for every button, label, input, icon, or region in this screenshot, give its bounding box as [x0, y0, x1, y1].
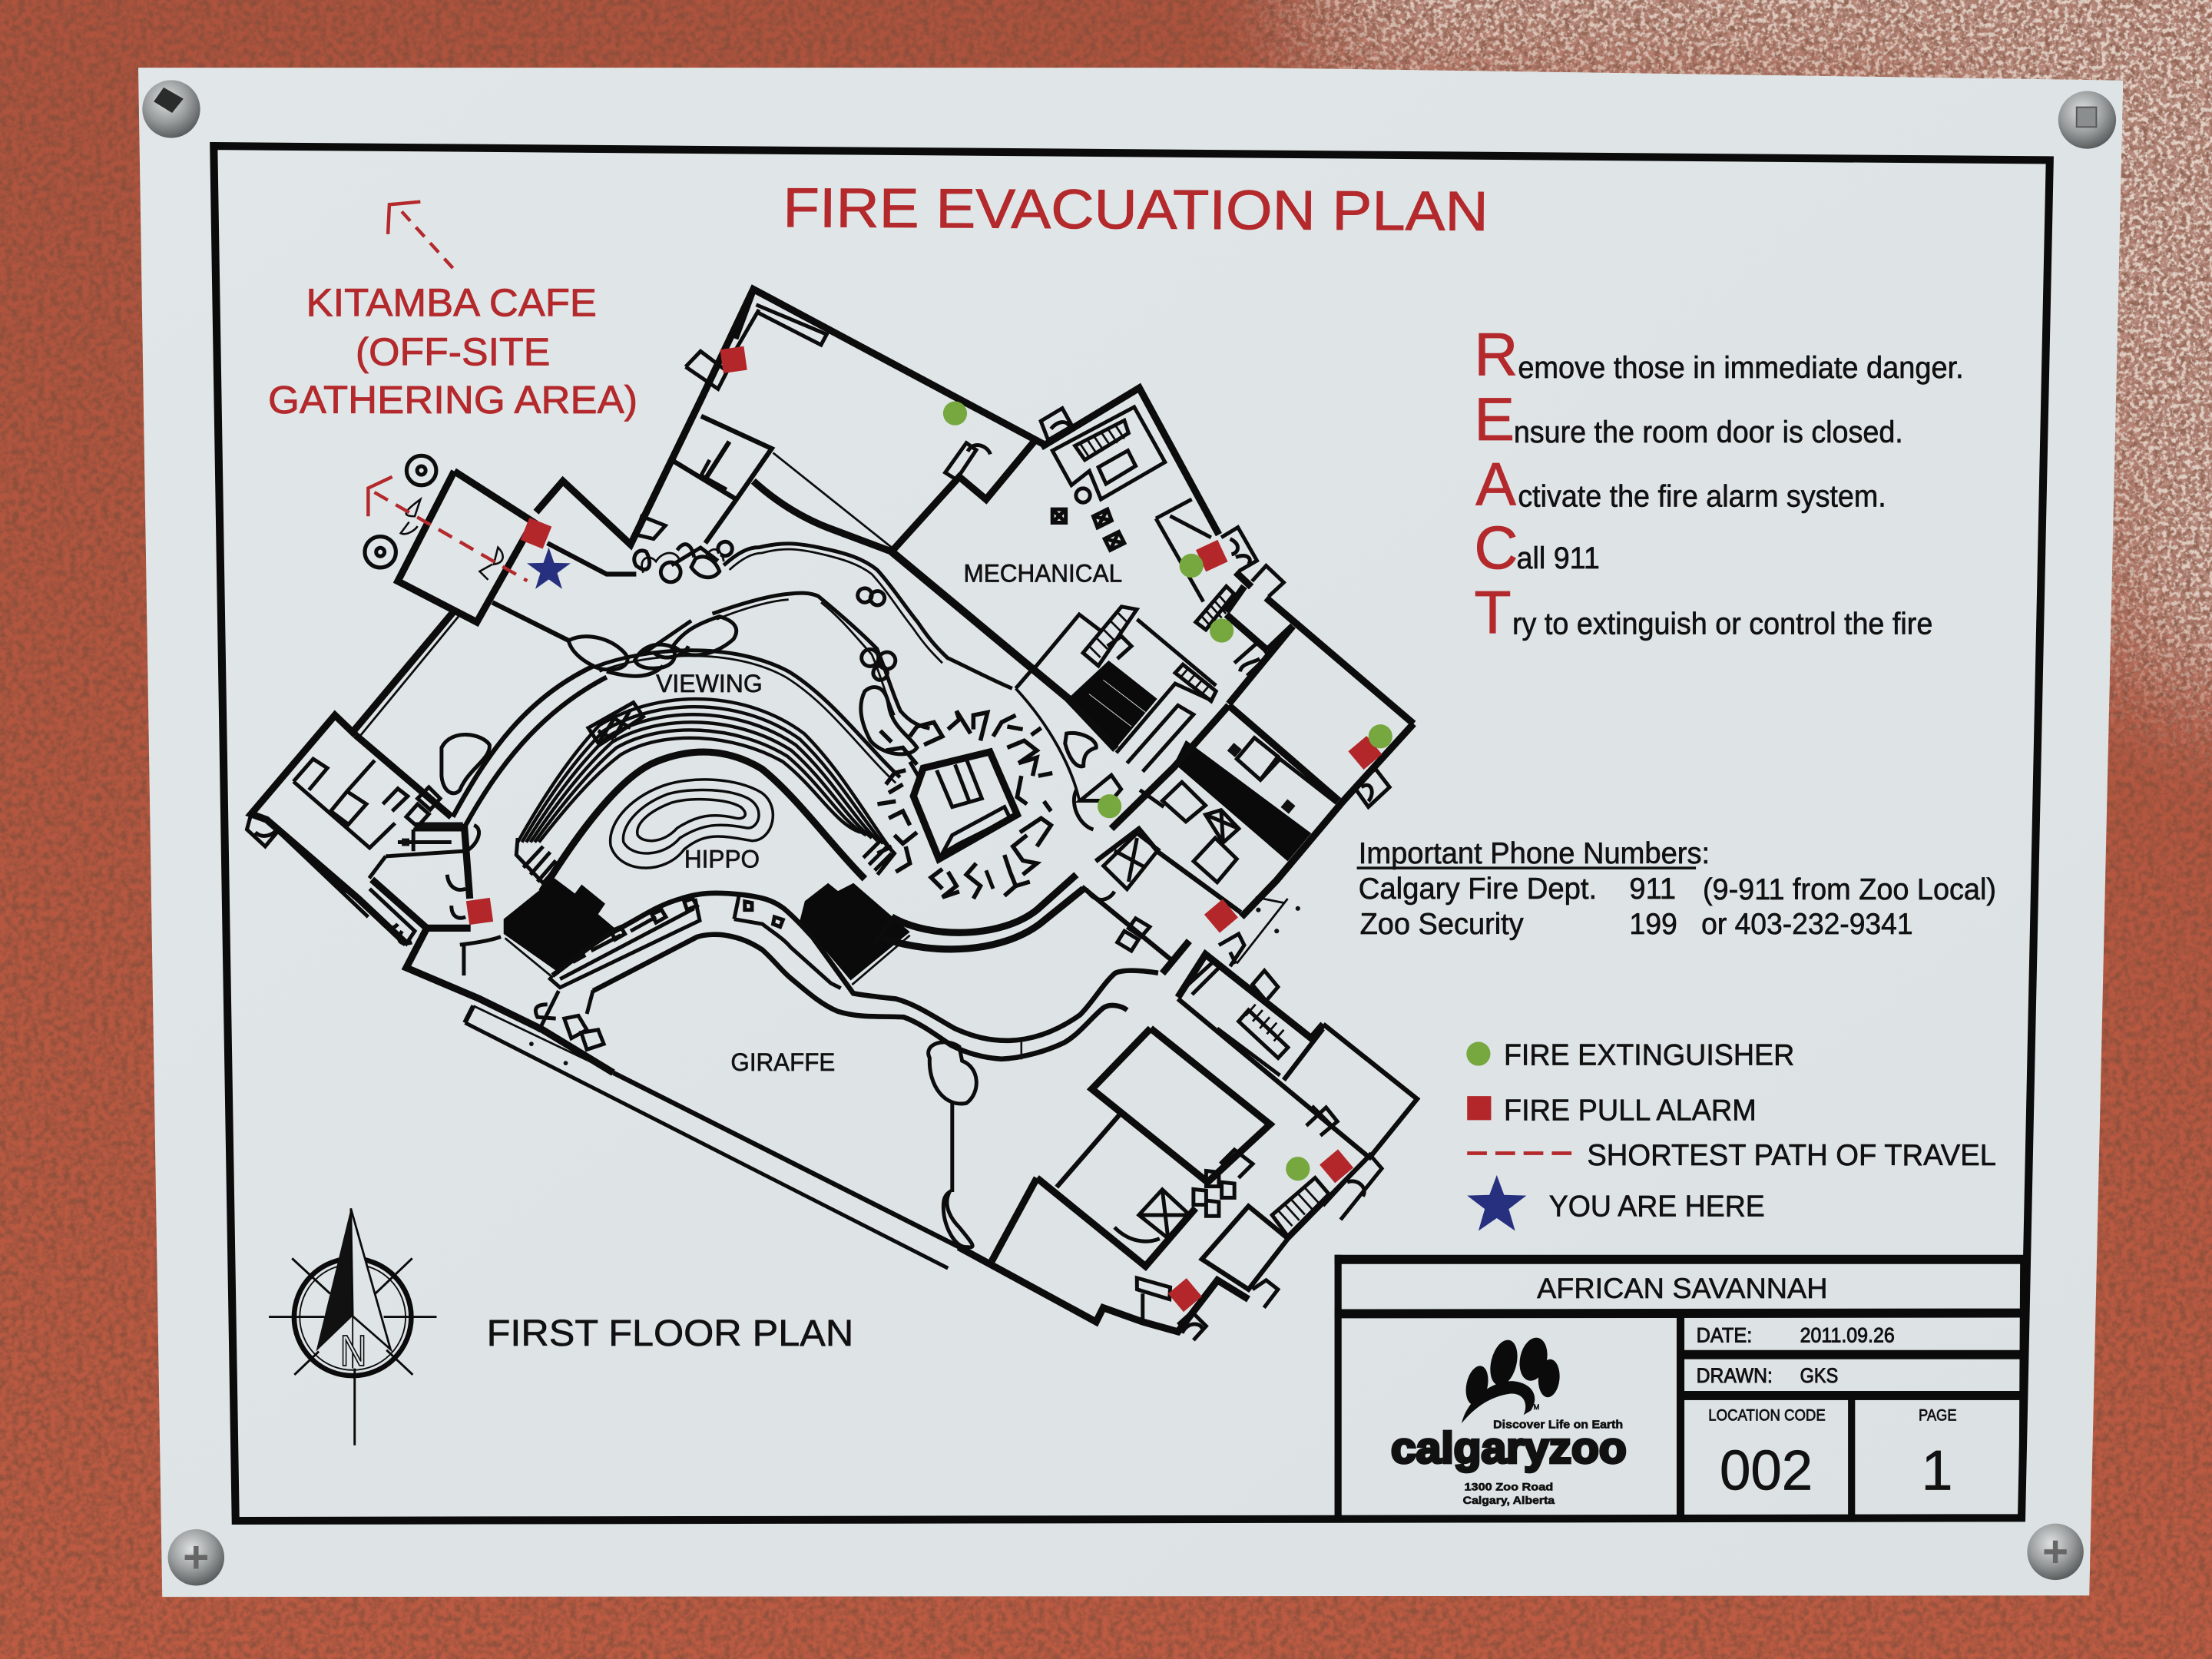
title block: GKS: [1800, 1364, 1838, 1387]
important phone numbers: 911: [1629, 873, 1676, 906]
legend: FIRE EXTINGUISHER: [1504, 1039, 1794, 1072]
title block: 2011.09.26: [1800, 1324, 1895, 1347]
legend: SHORTEST PATH OF TRAVEL: [1587, 1139, 1996, 1172]
Calgary Zoo logo: [1391, 1335, 1627, 1506]
REACT instructions: all 911: [1516, 541, 1600, 575]
screw: bottom right: [2027, 1524, 2084, 1580]
gathering area label: GATHERING AREA): [268, 377, 637, 422]
title block: DATE:: [1697, 1324, 1752, 1347]
Calgary Zoo logo: Calgary, Alberta: [1463, 1495, 1555, 1506]
important phone numbers: Zoo Security: [1360, 908, 1524, 941]
title block: LOCATION CODE: [1708, 1407, 1826, 1425]
legend: [1466, 1039, 1996, 1231]
floor plan drawing: [247, 290, 1417, 1340]
fire extinguishers: [943, 402, 1392, 1181]
west wing walls: [247, 611, 959, 1268]
important phone numbers: (9-911 from Zoo Local): [1703, 873, 1996, 906]
red dashed exit path: [368, 477, 527, 581]
east wing walls: [1082, 705, 1413, 973]
room labels: GIRAFFE: [730, 1048, 835, 1076]
room labels: [656, 560, 1122, 1076]
southeast wing walls: [959, 955, 1417, 1340]
REACT instructions: C: [1474, 514, 1518, 581]
important phone numbers: [1357, 837, 1996, 941]
hexagonal enclosure: [913, 752, 1017, 859]
REACT instructions: T: [1474, 579, 1512, 647]
Calgary Zoo logo: TM: [1529, 1403, 1539, 1411]
REACT instructions: emove those in immediate danger.: [1518, 351, 1964, 385]
room labels: HIPPO: [684, 846, 760, 873]
hippo pool contours: [611, 780, 773, 868]
REACT instructions: E: [1474, 386, 1515, 453]
off-site exit markers: [365, 455, 503, 580]
legend: YOU ARE HERE: [1549, 1190, 1765, 1223]
REACT instructions: ry to extinguish or control the fire: [1512, 608, 1932, 641]
REACT instructions: A: [1475, 451, 1516, 518]
you are here star: [527, 548, 571, 589]
screw: top left: [142, 80, 200, 138]
top exit arrow to Kitamba Cafe: [388, 202, 453, 268]
room labels: MECHANICAL: [963, 560, 1122, 588]
title block: [1335, 1255, 2027, 1520]
first floor plan label: FIRST FLOOR PLAN: [487, 1313, 853, 1354]
screw: bottom left: [168, 1529, 224, 1585]
important phone numbers: 199: [1629, 908, 1677, 941]
northeast mechanical wing walls: [892, 388, 1413, 830]
title: FIRE EVACUATION PLAN: [783, 177, 1488, 243]
compass rose: [269, 1208, 436, 1445]
title block: 1: [1922, 1439, 1952, 1502]
legend: FIRE PULL ALARM: [1504, 1094, 1757, 1127]
room labels: VIEWING: [656, 670, 763, 697]
Calgary Zoo logo: calgaryzoo: [1391, 1424, 1627, 1473]
gathering area label: (OFF-SITE: [356, 329, 550, 374]
REACT instructions: R: [1474, 321, 1518, 389]
fire pull alarms: [466, 346, 1382, 1312]
Calgary Zoo logo: 1300 Zoo Road: [1465, 1482, 1553, 1493]
outer black border: [214, 146, 2050, 1521]
walkway south of pool: [529, 893, 1300, 1065]
compass rose: N: [340, 1326, 367, 1376]
title block: AFRICAN SAVANNAH: [1537, 1273, 1827, 1304]
REACT instructions: [1474, 321, 1964, 647]
title block: PAGE: [1919, 1407, 1957, 1425]
REACT instructions: nsure the room door is closed.: [1514, 416, 1903, 449]
important phone numbers: Calgary Fire Dept.: [1359, 873, 1597, 906]
REACT instructions: ctivate the fire alarm system.: [1518, 479, 1886, 513]
title block: 002: [1720, 1439, 1813, 1502]
screw: top right: [2058, 91, 2116, 149]
gathering area label: [268, 280, 637, 422]
upper north wing walls: [398, 290, 1044, 641]
important phone numbers: Important Phone Numbers:: [1359, 837, 1710, 870]
Calgary Zoo logo: Discover Life on Earth: [1493, 1419, 1623, 1432]
central amphitheatre: [453, 651, 1084, 985]
important phone numbers: or 403-232-9341: [1701, 908, 1913, 941]
vegetation and meandering paths: [442, 541, 1052, 1247]
title block: DRAWN:: [1697, 1364, 1773, 1387]
gathering area label: KITAMBA CAFE: [306, 280, 597, 324]
